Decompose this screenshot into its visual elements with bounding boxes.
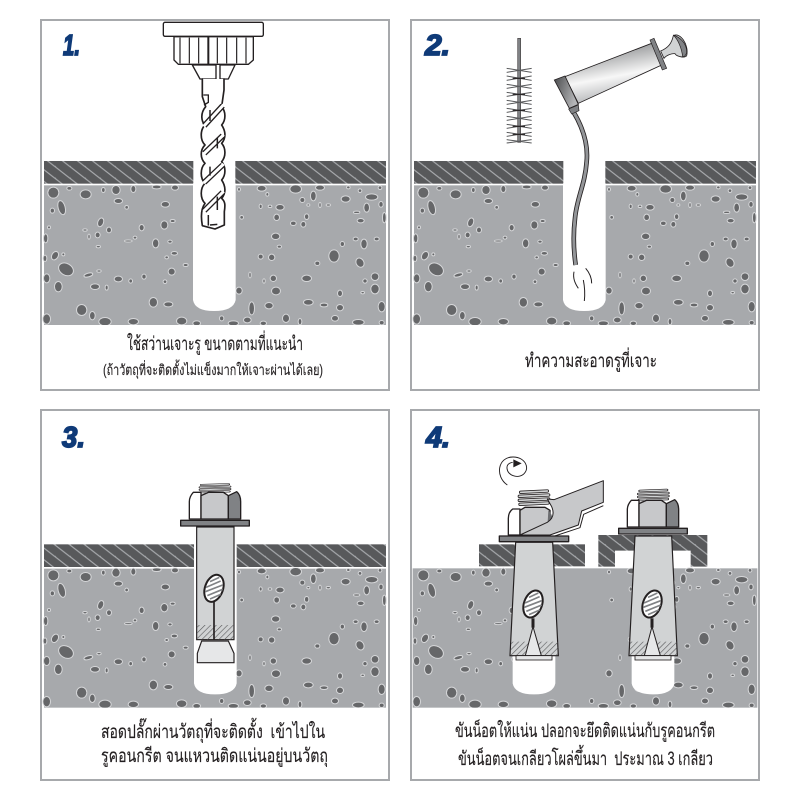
caption 3: สอดปลั๊กผ่านวัตถุที่จะติดตั้ง เข้าไปใน — [101, 718, 325, 744]
concrete and surface section — [43, 161, 386, 325]
concrete and surface section — [413, 161, 756, 325]
icon: blower pump with tube — [554, 35, 687, 301]
step number 1: 1. — [63, 30, 80, 62]
panel 1: drill the hole — [41, 20, 389, 390]
step number 3: 3. — [62, 422, 85, 454]
caption 4 — [455, 718, 715, 770]
step number 2: 2. — [424, 30, 450, 62]
caption 1 — [103, 330, 323, 379]
caption 2: ทำความสะอาดรูที่เจาะ — [525, 347, 657, 372]
panel 4: tighten the bolt — [411, 410, 759, 780]
caption 3 — [101, 718, 328, 768]
caption 1: (ถ้าวัตถุที่จะติดตั้งไม่แข็งมากให้เจาะผ่านได้เลย) — [103, 359, 323, 379]
icon: anchor with wrench — [499, 481, 603, 660]
concrete section — [413, 535, 757, 708]
icon: cleaning brush — [507, 38, 532, 143]
caption 3: รูคอนกรีต จนแหวนติดแน่นอยู่บนวัตถุ — [101, 745, 328, 768]
step number 4: 4. — [425, 422, 450, 454]
icon: rotation arrow — [499, 457, 527, 485]
concrete and surface section — [43, 544, 386, 708]
caption 1: ใช้สว่านเจาะรู ขนาดตามที่แนะนำ — [127, 330, 303, 355]
icon: anchor bolt in hole — [181, 484, 249, 663]
panel 3: insert the anchor — [41, 410, 389, 780]
panel 2: clean the hole — [411, 20, 759, 390]
icon: drill bit and chuck — [163, 22, 263, 229]
icon: tightened anchor — [619, 490, 687, 660]
